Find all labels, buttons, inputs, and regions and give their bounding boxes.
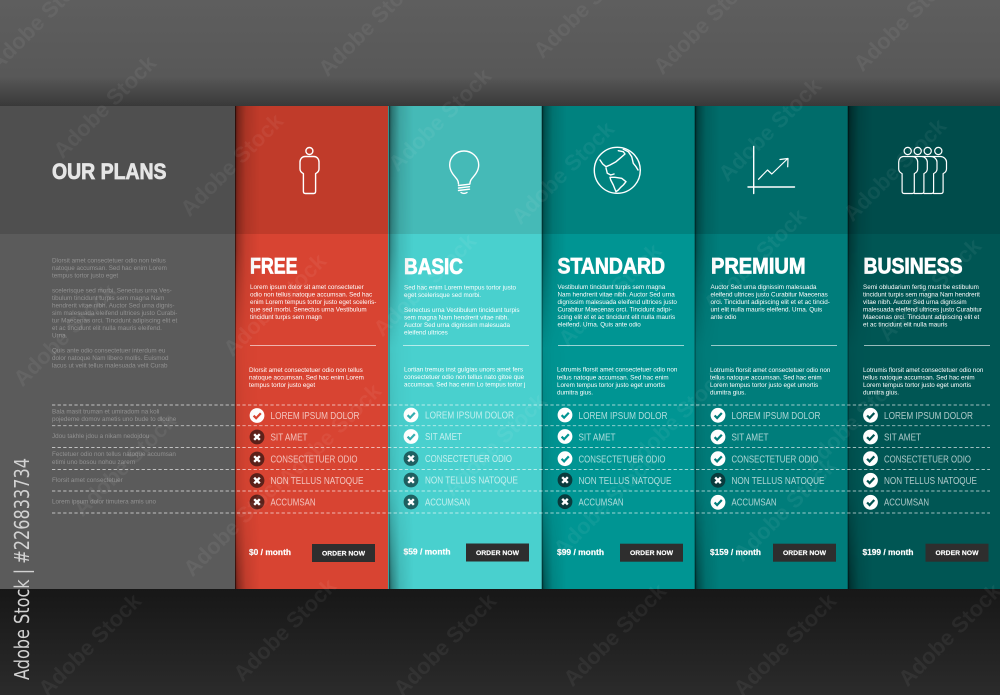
feature list: LOREM IPSUM DOLOR xyxy=(425,410,514,422)
feature descriptions: Fectetuer odio non tellus natoque accumsan xyxy=(52,451,176,458)
description: dignissim malesuada eleifend ultrices justo xyxy=(558,299,677,306)
panel: intro column xyxy=(0,106,235,589)
heading: our plans: OUR PLANS xyxy=(52,159,166,184)
order button: ORDER NOW xyxy=(935,550,979,557)
order button xyxy=(773,544,836,562)
secondary text: natoque accumsan. Sed hac enim Lorem xyxy=(249,375,364,382)
feature list: ACCUMSAN xyxy=(732,498,776,508)
text: Adobe Stock xyxy=(558,578,672,691)
feature list xyxy=(863,408,977,510)
feature list: ACCUMSAN xyxy=(425,497,470,508)
text: Adobe Stock xyxy=(698,203,812,316)
feature list: NON TELLUS NATOQUE xyxy=(732,476,825,487)
order button: ORDER NOW xyxy=(476,550,520,557)
description: Semi obludarium fertig must be estibulum xyxy=(863,284,979,291)
price: $99 / month xyxy=(557,547,604,557)
secondary text: tempus tortor justo eget xyxy=(249,382,315,389)
feature list: CONSECTETUER ODIO xyxy=(270,454,358,466)
feature list: CONSECTETUER ODIO xyxy=(732,454,819,465)
panel: basic plan xyxy=(388,106,542,589)
text: Adobe Stock xyxy=(728,453,842,566)
feature list xyxy=(404,408,518,509)
description: tincidunt turpis sem magna Nam hendrerit xyxy=(863,292,980,299)
description: ante odio xyxy=(710,314,737,321)
icon: growth chart xyxy=(748,146,794,194)
description: Senectus urna Vestibulum tincidunt turpis xyxy=(404,307,520,314)
feature descriptions: Bala masit truman et umiradom na koli xyxy=(52,408,159,416)
icon: person xyxy=(300,148,319,194)
description: Lorem ipsum dolor sit amet consectetuer xyxy=(250,284,364,291)
description: tincidunt turpis sem magn xyxy=(250,314,322,321)
feature list: CONSECTETUER ODIO xyxy=(425,454,512,465)
intro text: tibulum tincidunt turpis sem magna Nam xyxy=(52,295,164,302)
plan name: BASIC xyxy=(404,254,463,279)
plan name: BUSINESS xyxy=(864,254,962,278)
feature list: ACCUMSAN xyxy=(578,498,624,508)
intro text: scelerisque sed morbi. Senectus urna Ves- xyxy=(52,288,172,295)
intro text: dolor natoque Nam libero mollis. Euismod xyxy=(52,355,169,362)
feature list: NON TELLUS NATOQUE xyxy=(270,476,364,487)
text: Adobe Stock xyxy=(838,113,952,226)
feature descriptions: Florsit amet consectetuer xyxy=(52,477,123,484)
text: Adobe Stock xyxy=(438,388,552,501)
secondary text: accumsan. Sed hac enim Lo tempus tortor j xyxy=(404,382,525,389)
feature list: SIT AMET xyxy=(884,432,921,444)
description: odio non tellus natoque accumsan. Sed hac xyxy=(250,292,372,299)
order button xyxy=(926,544,988,562)
intro text: Urna. xyxy=(52,332,68,340)
text: Adobe Stock xyxy=(383,63,497,176)
divider xyxy=(403,345,529,346)
feature list: LOREM IPSUM DOLOR xyxy=(270,411,360,422)
text: Adobe Stock xyxy=(873,233,987,346)
order button xyxy=(620,544,683,562)
intro text: tur Maecenas orci. Tincidunt adipiscing elit et xyxy=(52,318,178,324)
divider xyxy=(250,345,376,346)
description: Vestibulum tincidunt turpis sem magna xyxy=(558,284,666,291)
order button xyxy=(312,544,375,562)
secondary text: Lotrumis florsit amet consectetuer odio non xyxy=(863,367,984,374)
text: Adobe Stock xyxy=(175,108,289,221)
text: Adobe Stock xyxy=(798,363,912,476)
secondary text: Lorem tempus tortor justo eget umortis xyxy=(863,382,971,389)
feature list: LOREM IPSUM DOLOR xyxy=(732,411,820,422)
text: Adobe Stock xyxy=(178,468,292,581)
secondary text: tellus natoque accumsan. Sed hac enim xyxy=(863,375,975,382)
secondary text: Dlorsit amet consectetuer odio non tellus xyxy=(249,367,363,374)
order button xyxy=(466,544,529,562)
feature list: SIT AMET xyxy=(270,432,308,444)
vertical stock id label: Adobe Stock | #226833734 xyxy=(10,458,34,680)
secondary text: Lorem tempus tortor justo eget umortis xyxy=(710,382,818,389)
secondary text: tellus natoque accumsan. Sed hac enim xyxy=(557,375,669,382)
plan name: PREMIUM xyxy=(711,254,806,278)
description: enim Lorem tempus tortor justo eget sceleris- xyxy=(250,299,376,306)
plan name: FREE xyxy=(250,254,298,278)
feature list: LOREM IPSUM DOLOR xyxy=(578,411,668,422)
text: Adobe Stock xyxy=(48,50,162,163)
intro text: hendrerit vitae nibh. Auctor Sed urna dignis- xyxy=(52,303,175,310)
feature list: NON TELLUS NATOQUE xyxy=(884,476,977,487)
text: Adobe Stock xyxy=(548,448,662,561)
text: Adobe Stock xyxy=(228,573,342,686)
feature list xyxy=(250,408,364,509)
panel: free plan xyxy=(235,106,388,589)
feature descriptions: etimi uno bosou nohou zarem xyxy=(52,459,135,466)
feature list: SIT AMET xyxy=(732,432,768,444)
order button: ORDER NOW xyxy=(630,550,674,557)
order button: ORDER NOW xyxy=(783,550,827,557)
feature list: NON TELLUS NATOQUE xyxy=(425,476,518,486)
description: sem magna Nam hendrerit vitae nibh. xyxy=(404,315,509,322)
intro text: lacus ut velit tellus malesuada velit Curab xyxy=(52,362,168,370)
panel: premium plan xyxy=(695,106,848,589)
icon: globe xyxy=(594,147,640,193)
intro text: et ac tincidunt elit nulla mauris eleifend. xyxy=(52,325,162,332)
description: malesuada eleifend ultrices justo Curabitur xyxy=(863,306,982,314)
feature list: ACCUMSAN xyxy=(270,498,316,508)
description: vitae nibh. Auctor Sed urna dignissim xyxy=(863,299,967,306)
text: Adobe Stock xyxy=(218,248,332,361)
divider xyxy=(558,345,684,346)
description: unt elit nulla mauris eleifend. Urna. Quis xyxy=(710,306,822,314)
icon: team of people xyxy=(899,147,946,194)
description: eleifend ultrices xyxy=(404,330,448,337)
text: Adobe Stock xyxy=(68,408,182,521)
secondary text: consectetuer odio non tellus nato gitoe que xyxy=(404,374,525,381)
price: $199 / month xyxy=(862,547,914,557)
description: que sed morbi. Senectus urna Vestibulum xyxy=(250,306,367,314)
panel: standard plan xyxy=(542,106,695,589)
divider xyxy=(864,345,990,346)
description: Curabitur Maecenas orci. Tincidunt adipi- xyxy=(558,307,672,314)
feature list: SIT AMET xyxy=(425,432,462,443)
description: orci. Tincidunt adipiscing elit et et ac tincid- xyxy=(710,299,830,306)
feature list xyxy=(711,408,825,510)
feature list: SIT AMET xyxy=(578,432,616,444)
intro text: sim malesuada eleifend ultrices justo Curabi- xyxy=(52,310,177,317)
feature list: LOREM IPSUM DOLOR xyxy=(884,411,973,422)
secondary text: Lorem tempus tortor justo eget umortis xyxy=(557,382,665,389)
panel: business plan xyxy=(848,106,1000,589)
order button: ORDER NOW xyxy=(322,550,366,557)
feature list: CONSECTETUER ODIO xyxy=(578,454,666,465)
text: Adobe Stock xyxy=(273,378,387,491)
price: $0 / month xyxy=(249,547,291,557)
text: Adobe Stock xyxy=(618,363,732,476)
text: Adobe Stock xyxy=(713,73,827,186)
secondary text: Lotrumis florsit amet consectetuer odio non xyxy=(710,367,831,374)
description: Maecenas orci. Tincidunt adipiscing elit et xyxy=(863,314,979,321)
feature descriptions: Jdou takhle jdou a nikam nedojdou xyxy=(52,433,150,440)
price: $59 / month xyxy=(404,547,450,557)
intro text: natoque accumsan. Sed hac enim Lorem xyxy=(52,265,167,272)
feature list: NON TELLUS NATOQUE xyxy=(578,476,672,487)
text: Adobe Stock xyxy=(553,238,667,351)
text: Adobe Stock xyxy=(506,116,620,229)
divider xyxy=(711,345,837,346)
secondary text: dumitra gius. xyxy=(557,390,593,397)
description: Auctor Sed urna dignissim malesuada xyxy=(710,284,817,291)
description: eleifend ultrices justo Curabitur Maecenas xyxy=(710,292,828,298)
plan name: STANDARD xyxy=(558,254,665,278)
description: et ac tincidunt elit nulla mauris xyxy=(863,322,947,329)
feature list: CONSECTETUER ODIO xyxy=(884,454,971,465)
text: Adobe Stock xyxy=(8,278,122,391)
secondary text: Lortian tremus inst gulgias unors amet fers xyxy=(404,367,523,374)
description: eleifend. Urna. Quis ante odio xyxy=(558,322,641,329)
secondary text: dumitra gius. xyxy=(710,390,746,397)
feature descriptions: Lorem ipsum dolor timutera amis uno xyxy=(52,499,156,506)
text: Adobe Stock xyxy=(368,228,482,341)
price: $159 / month xyxy=(710,547,761,557)
description: Sed hac enim Lorem tempus tortor justo xyxy=(404,285,516,292)
secondary text: tellus natoque accumsan. Sed hac enim xyxy=(710,375,822,382)
description: scing elit et et ac tincidunt elit nulla mauris xyxy=(558,314,675,321)
feature list xyxy=(558,408,672,509)
description: eget scelerisque sed morbi. xyxy=(404,292,481,299)
secondary text: Lotrumis florsit amet consectetuer odio non xyxy=(557,367,678,374)
description: Auctor Sed urna dignissim malesuada xyxy=(404,322,511,329)
icon: light bulb xyxy=(450,151,479,193)
feature list: ACCUMSAN xyxy=(884,498,929,508)
feature descriptions: pojedeme domov ametis uno bude to dlouhe xyxy=(52,416,177,423)
intro text: Dlorsit amet consectetuer odio non tellus xyxy=(52,258,166,265)
intro text: Quis ante odio consectetuer interdum eu xyxy=(52,348,166,355)
secondary text: dumitra gius. xyxy=(863,390,899,397)
intro text: tempus tortor justo eget xyxy=(52,273,118,280)
description: Nam hendrerit vitae nibh. Auctor Sed urna xyxy=(558,292,675,299)
